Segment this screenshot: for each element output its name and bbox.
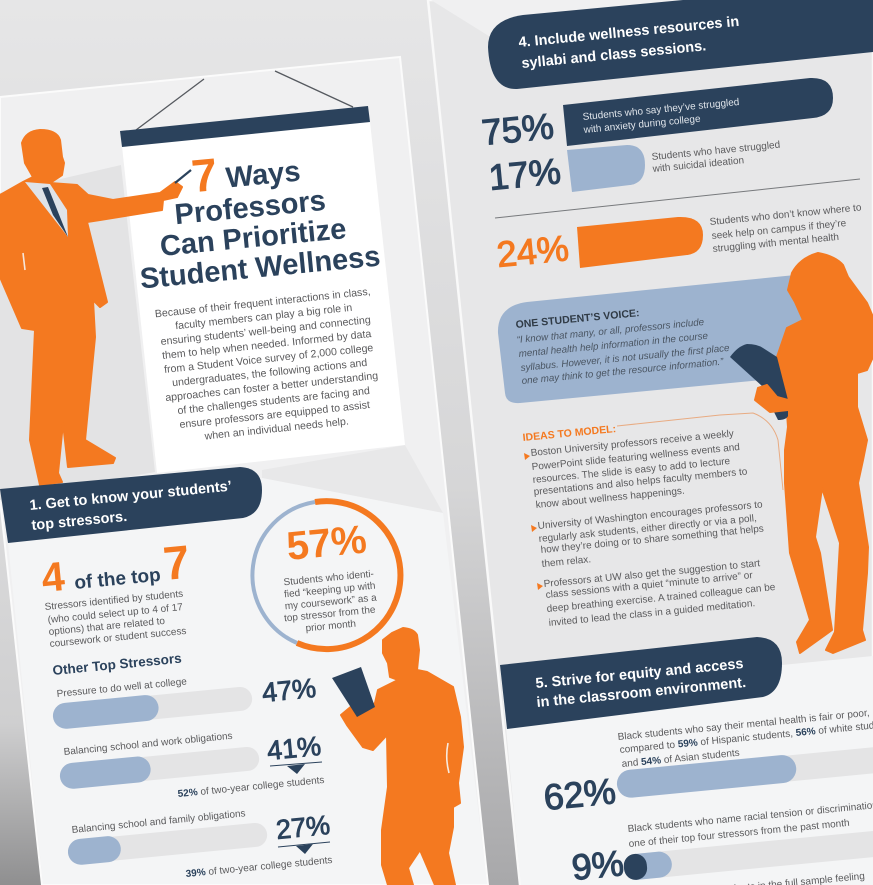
callout: one student's voice: ONE STUDENT’S VOICE: xyxy=(515,307,640,331)
block: ideas to model: how they’re doing or to share something that helps xyxy=(540,524,764,556)
block: ideas to model xyxy=(522,413,783,629)
title: Professors xyxy=(173,185,327,231)
block: ideas to model: know about wellness happenings. xyxy=(535,486,685,511)
heading: section 1: top stressors. xyxy=(31,509,128,534)
bar chart: other top stressors: 27% xyxy=(275,810,331,845)
poster body text xyxy=(154,286,379,443)
title: Can Prioritize xyxy=(159,213,348,263)
title: Ways xyxy=(224,156,302,195)
block: ideas to model: invited to lead the class in a guided meditation. xyxy=(548,598,756,629)
chart: 57% donut: my coursework” as a xyxy=(284,593,378,612)
bar chart: other top stressors: 52% of two-year college students xyxy=(177,775,325,800)
stat: 4 of the top 7: 4 xyxy=(39,553,67,601)
callout: one student's voice: “I know that many, or all, professors include xyxy=(516,317,705,346)
poster body text: from a Student Voice survey of 2,000 college xyxy=(164,342,374,376)
panel: hanging poster xyxy=(120,106,405,473)
stat: 75% anxiety: Students who say they’ve struggled xyxy=(582,97,740,123)
chart: 57% donut: fied “keeping up with xyxy=(284,581,376,600)
poster body text: faculty members can play a big role in xyxy=(175,302,353,332)
heading: section 4 xyxy=(488,0,873,89)
heading: section 5: 5. Strive for equity and access xyxy=(535,656,744,692)
stat: 17% suicidal ideation: Students who have struggled xyxy=(651,140,781,163)
stat: 24% help seeking: seek help on campus if they’re xyxy=(711,218,847,242)
bar chart: other top stressors: Balancing school and family obligations xyxy=(71,808,246,836)
poster body text: ensuring students’ well-being and connecting xyxy=(160,314,371,348)
poster body text: Because of their frequent interactions in class, xyxy=(154,286,371,320)
callout: one student's voice: one may think to get the resource information.” xyxy=(521,357,725,387)
panel: right page xyxy=(428,0,873,885)
stat: 4 of the top 7: of the top xyxy=(73,565,162,594)
callout: one student's voice: syllabus. However, it is not usually the first place xyxy=(520,343,731,374)
bar chart: 9% racial tension: one of their top four stressors from the past month xyxy=(628,818,850,850)
chart: 57% donut: prior month xyxy=(305,619,356,634)
bar chart: 62% mental health: Black students who say their mental health is fair or poor, xyxy=(617,708,870,743)
callout: one student's voice: mental health help information in the course xyxy=(518,331,709,360)
stat: 17% suicidal ideation xyxy=(487,140,781,198)
block: ideas to model: Professors at UW also get the suggestion to start xyxy=(543,558,761,590)
stat: 4 of the top 7: coursework or student success xyxy=(49,626,187,650)
stat: 4 of the top 7: 7 xyxy=(161,535,192,590)
title: 7 xyxy=(189,148,220,202)
block: ideas to model: IDEAS TO MODEL: xyxy=(522,423,617,444)
poster body text: approaches can foster a better understanding xyxy=(165,370,379,404)
stat: 4 of the top 7: Stressors identified by students xyxy=(44,589,184,613)
bar chart: other top stressors: 41% xyxy=(266,731,322,766)
title xyxy=(139,148,382,296)
icon: woman silhouette with tablet xyxy=(730,253,873,653)
block: ideas to model: presentations and also helps faculty members to xyxy=(533,466,748,498)
poster body text: undergraduates, the following actions and xyxy=(172,357,368,389)
block: ideas to model: class sessions with a quiet “minute to arrive” or xyxy=(545,570,754,601)
bar chart: other top stressors: Pressure to do well at college xyxy=(56,676,188,700)
stat: 17% suicidal ideation: with suicidal ideation xyxy=(651,155,745,175)
bar chart: other top stressors: Balancing school and work obligations xyxy=(63,731,233,758)
chart: 57% donut xyxy=(252,501,400,649)
block: ideas to model: Boston University professors receive a weekly xyxy=(530,428,734,459)
heading: section 1 xyxy=(0,467,262,543)
bar chart: other top stressors: 39% of two-year college students xyxy=(185,855,333,880)
block: ideas to model: University of Washington encourages professors to xyxy=(537,499,764,532)
heading: section 4: 4. Include wellness resources in xyxy=(518,14,740,51)
chart: 57% donut: top stressor from the xyxy=(284,605,376,624)
poster hanger wires xyxy=(136,71,353,130)
stat: 4 of the top 7 xyxy=(39,535,192,650)
bar chart: 62% mental health: 62% xyxy=(542,770,617,818)
stat: 4 of the top 7: options) that are related to xyxy=(48,616,166,638)
stat: 24% help seeking: struggling with mental health xyxy=(712,232,839,255)
bar chart: other top stressors: 47% xyxy=(261,673,317,708)
bar chart: 62% mental health xyxy=(542,708,873,818)
poster body text: ensure professors are equipped to assist xyxy=(179,399,371,431)
stat: 4 of the top 7: (who could select up to 4 of 17 xyxy=(47,602,184,626)
block: ideas to model: resources. The slide is easy to add to lecture xyxy=(532,456,731,486)
block: ideas to model: regularly ask students, either directly or via a poll, xyxy=(538,513,757,545)
chart: 57% donut: 57% xyxy=(285,517,369,569)
icon: professor silhouette pointing xyxy=(0,130,191,485)
stat: 24% help seeking xyxy=(495,202,862,275)
poster body text: them to help when needed. Informed by data xyxy=(162,328,372,362)
bar chart: other top stressors xyxy=(52,673,333,880)
stat: 24% help seeking: Students who don’t know where to xyxy=(709,202,862,228)
chart: 57% donut: Students who identi- xyxy=(283,569,374,588)
icon: student silhouette with tablet xyxy=(332,628,463,885)
bar chart: 62% mental health: and 54% of Asian students xyxy=(621,748,740,770)
block: ideas to model: them relax. xyxy=(541,554,592,570)
heading: other top stressors: Other Top Stressors xyxy=(52,651,182,678)
stat: 75% anxiety xyxy=(480,78,833,153)
panel: left page xyxy=(0,57,488,885)
heading: section 4: syllabi and class sessions. xyxy=(521,38,707,72)
callout: one student's voice xyxy=(498,274,815,403)
bar chart: 9% racial tension xyxy=(570,799,873,885)
block: ideas to model: deep breathing exercise. A trained colleague can be xyxy=(546,582,776,615)
heading: section 1: 1. Get to know your students’ xyxy=(29,479,232,514)
stat: 24% help seeking: 24% xyxy=(495,227,570,275)
heading: section 5: in the classroom environment. xyxy=(536,675,747,711)
poster body text: of the challenges students are facing and xyxy=(177,385,370,417)
stat: 17% suicidal ideation: 17% xyxy=(487,150,562,198)
stat: 75% anxiety: 75% xyxy=(480,105,555,153)
stat: 75% anxiety: with anxiety during college xyxy=(582,114,701,136)
poster body text: when an individual needs help. xyxy=(203,415,349,443)
block: ideas to model: PowerPoint slide featuring wellness events and xyxy=(531,442,740,473)
title: Student Wellness xyxy=(139,241,382,296)
heading: section 5 xyxy=(500,637,782,729)
